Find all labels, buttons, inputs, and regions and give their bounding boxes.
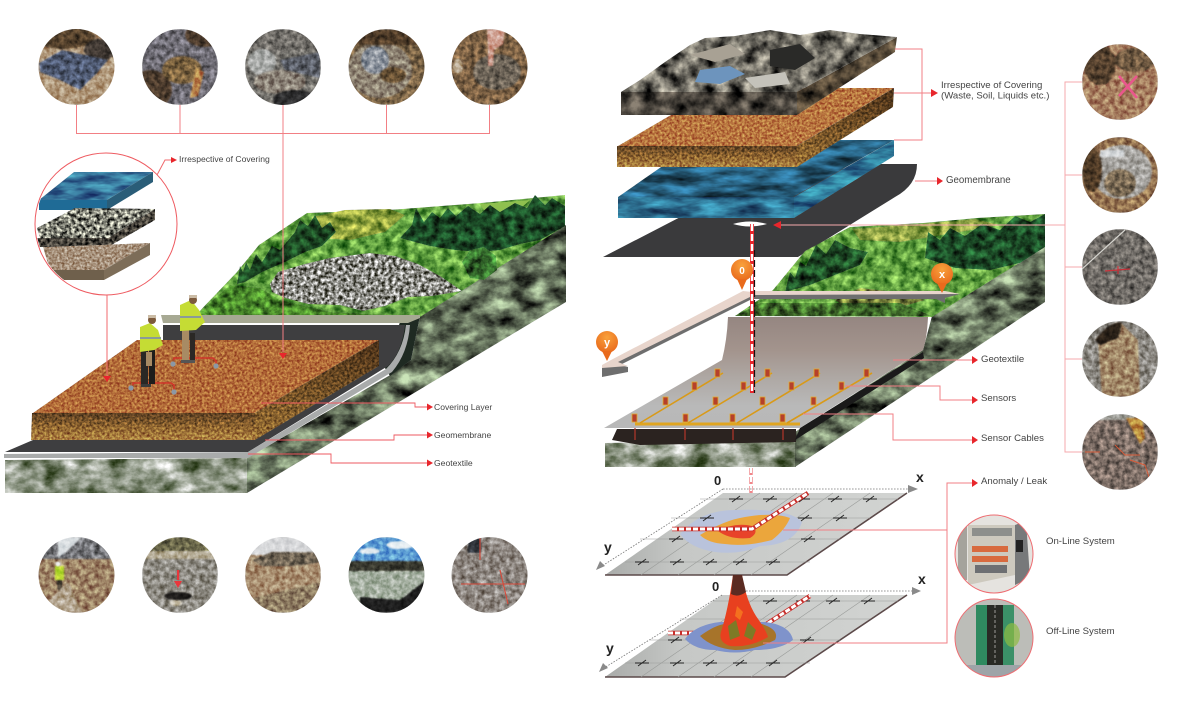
chart: anomaly map plate 1: y	[604, 539, 612, 555]
sensor cables	[635, 373, 872, 424]
label: sensors: Sensors	[981, 393, 1016, 404]
label: covering layer: Covering Layer	[434, 402, 492, 412]
label: geomembrane: Geomembrane	[946, 175, 1011, 186]
photo: worker on lined slope	[38, 537, 116, 613]
connector: vertical measurement line	[751, 224, 754, 529]
pin: x: x	[939, 269, 946, 281]
concrete lip	[161, 315, 420, 323]
worker 2 with sensor frame	[170, 295, 219, 369]
chart: anomaly map plate 2	[599, 571, 926, 677]
panel: left landfill cross-section	[4, 195, 566, 493]
layer: geomembrane sheet	[603, 164, 917, 257]
covering layer	[31, 340, 379, 440]
rock under sheet	[605, 440, 796, 467]
label: geotextile (left): Geotextile	[434, 458, 473, 468]
dark band beneath sheet	[612, 429, 796, 445]
chart: anomaly map plate 1: 0	[714, 473, 721, 488]
layer: water slab	[618, 140, 894, 218]
photo: finger pointing at leak	[451, 29, 529, 105]
pin: y	[596, 331, 618, 361]
icon: hole in geomembrane	[733, 222, 767, 226]
heat blob	[680, 510, 802, 553]
worker 1 with sensor frame	[128, 315, 177, 395]
label: sensor cables	[803, 414, 1044, 444]
label: geotextile: Geotextile	[981, 354, 1024, 365]
rock strata of left block	[5, 225, 566, 493]
connector: right photo bracket	[773, 82, 1082, 452]
axes	[604, 591, 912, 668]
sensors	[632, 369, 869, 422]
label: geomembrane (left): Geomembrane	[434, 430, 492, 440]
label: covering layer	[261, 402, 492, 412]
label: geomembrane	[915, 175, 1011, 186]
connector: top photo row	[76, 105, 490, 359]
photo: pink cross on soil	[1082, 44, 1158, 120]
photo: lined embankment	[245, 537, 321, 613]
chart: anomaly map plate 1	[596, 469, 924, 575]
heat cone	[685, 575, 793, 652]
photo: reservoir under sky	[348, 537, 426, 613]
layer: orange soil slab	[617, 88, 894, 167]
photo: exposed silver liner	[1082, 137, 1158, 213]
chart: anomaly map plate 2: 0	[712, 579, 719, 594]
geomembrane wall and sheet	[5, 325, 405, 452]
photo: exposed liner tear	[38, 29, 114, 105]
photo: leak with red arrow	[142, 537, 218, 613]
photo row: top defects	[38, 29, 528, 105]
waste pile	[270, 253, 462, 311]
black rim along sheet edge	[795, 352, 924, 440]
panel: on-line system	[955, 515, 1115, 593]
photo column: right leak photos	[1082, 44, 1158, 490]
photo: gravel with red mark	[1082, 229, 1158, 305]
geotextile strip	[4, 325, 410, 458]
label: on-line system: On-Line System	[1046, 536, 1115, 547]
label: anomaly / leak with connector: Anomaly / Leak	[981, 476, 1047, 487]
label: geomembrane (left)	[265, 430, 492, 440]
photo: gouged liner	[142, 29, 218, 105]
label: geotextile	[893, 354, 1024, 365]
connector: layer bracket	[894, 49, 938, 140]
layer: geotextile sheet	[604, 317, 928, 428]
rock cliff side	[795, 247, 1045, 467]
dashed traces	[668, 596, 810, 633]
pin: y: y	[604, 337, 611, 349]
photo: marked gravel with cross	[451, 537, 529, 613]
label: sensors	[845, 386, 1016, 404]
label: sensor cables: Sensor Cables	[981, 433, 1044, 444]
dashed trace	[672, 493, 808, 529]
connector: inset to covering layer	[103, 295, 111, 382]
label: anomaly / leak with connector	[763, 476, 1047, 643]
label: geotextile (left)	[248, 454, 473, 468]
photo: soil-covered patch	[348, 29, 426, 105]
chart: anomaly map plate 2: x	[918, 571, 926, 587]
label: irrespective of covering (waste, soil, liquids): Irrespective of Covering	[941, 80, 1042, 91]
pin: origin 0	[731, 259, 753, 290]
panel: right exploded layers	[603, 30, 917, 257]
pin: x	[931, 263, 953, 293]
layer: waste slab	[621, 30, 897, 115]
photo: excavator bucket over marked ground	[1082, 414, 1158, 490]
chart: anomaly map plate 2: y	[606, 640, 614, 656]
panel: off-line system	[955, 599, 1115, 677]
photo: excavated hole	[1082, 321, 1158, 397]
label: irrespective of covering	[157, 154, 270, 175]
pin: origin 0: 0	[739, 266, 745, 277]
chart: anomaly map plate 1: x	[916, 469, 924, 485]
photo: torn pipe on gravel	[245, 29, 321, 110]
panel: sensor grid block	[604, 214, 1045, 467]
callout: inset circle of covering types	[35, 153, 177, 295]
sensor spikes	[635, 428, 783, 440]
arrow: y axis	[602, 291, 752, 377]
label: irrespective of covering: Irrespective of Covering	[179, 154, 270, 164]
landscape behind sheet	[735, 214, 1045, 317]
label: irrespective of covering (waste, soil, liquids): (Waste, Soil, Liquids etc.)	[941, 90, 1049, 102]
photo row: bottom sites	[38, 537, 529, 613]
arrow: x axis	[752, 291, 960, 303]
landscape with grass and forest	[195, 195, 565, 317]
axes	[602, 489, 910, 566]
label: off-line system: Off-Line System	[1046, 626, 1115, 637]
